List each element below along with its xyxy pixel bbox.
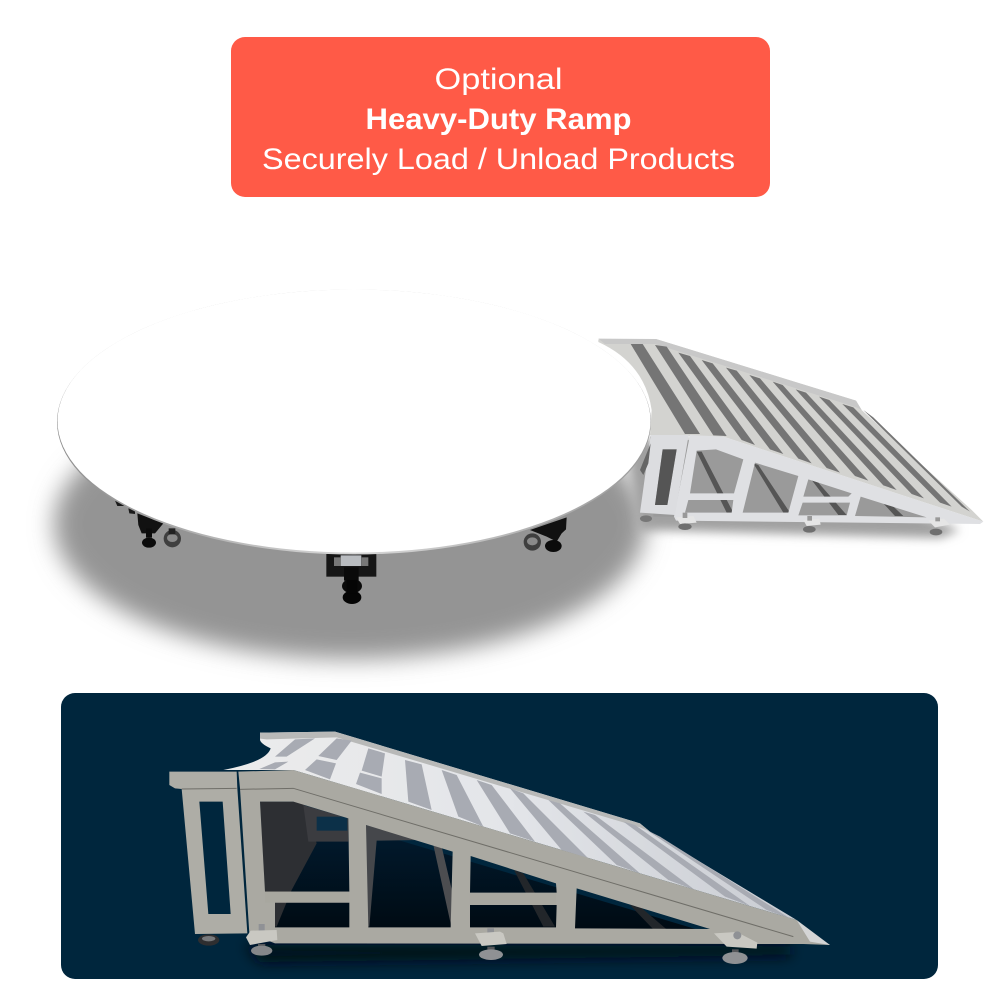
close-up frame tube 1 <box>265 892 349 903</box>
turntable support feet <box>115 501 567 604</box>
foot: centre <box>326 554 376 604</box>
foot: far left small <box>115 501 135 514</box>
foot: right <box>524 517 567 552</box>
header banner <box>231 37 770 197</box>
turntable disc <box>57 290 651 554</box>
ramp end module opening <box>655 449 677 505</box>
ramp close-up <box>169 732 830 964</box>
ramp rear edge shadow <box>640 443 651 475</box>
disc top <box>58 290 650 552</box>
close-up levelling feet <box>198 924 757 964</box>
disc edge <box>57 290 651 554</box>
close-up grip stripes <box>259 738 790 918</box>
banner line: Optional: Optional <box>434 63 562 96</box>
ramp shadow <box>625 440 960 538</box>
close-up frame tube 2 <box>470 893 556 905</box>
close-up frame seam <box>182 788 793 937</box>
ramp deck <box>598 339 983 522</box>
banner line: Securely Load / Unload Products: Securely Load / Unload Products <box>262 143 735 176</box>
turntable shadow <box>54 389 646 659</box>
ramp close-up shadow <box>245 945 790 962</box>
close-up deck rear edge <box>260 732 650 832</box>
foot: left <box>137 513 181 548</box>
ramp grip stripes <box>631 344 970 512</box>
ramp attached to turntable <box>598 339 983 535</box>
close-up ramp tip <box>797 920 830 945</box>
ramp under struts <box>697 452 903 516</box>
ramp levelling feet <box>640 513 950 535</box>
ramp end module <box>640 435 689 515</box>
ramp top edge <box>598 339 862 410</box>
close-up interior structure <box>260 802 667 929</box>
close-up frame openings <box>250 797 710 933</box>
close-up side frame <box>238 770 830 945</box>
close-up end module <box>169 772 247 934</box>
ramp side frame <box>674 435 983 524</box>
dark navy panel <box>61 693 938 979</box>
close-up deck <box>223 732 797 920</box>
ramp side frame holes backing <box>650 437 930 518</box>
banner background <box>231 37 770 197</box>
banner line: Heavy-Duty Ramp: Heavy-Duty Ramp <box>366 103 632 136</box>
